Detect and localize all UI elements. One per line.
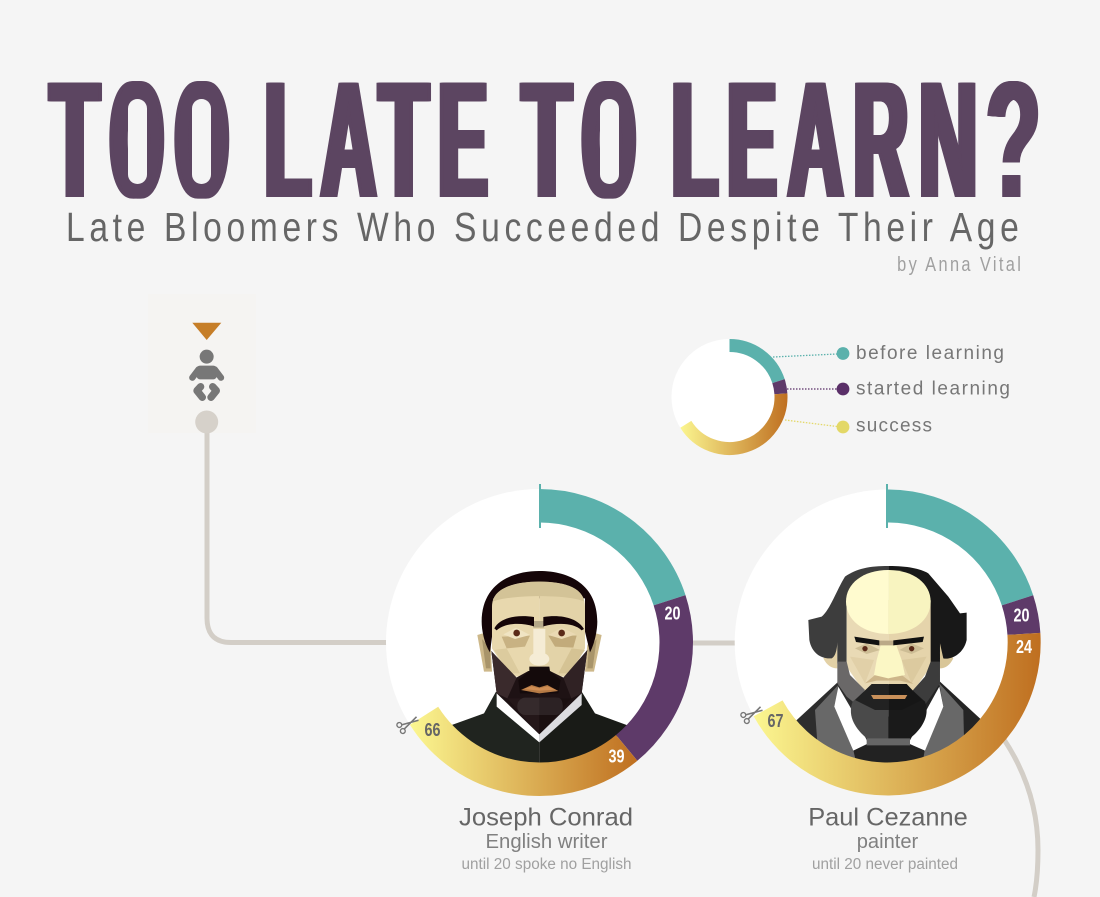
ring: Cezanne segments: [768, 484, 1024, 779]
portrait: Joseph Conrad: [452, 571, 627, 762]
title: E: [728, 48, 776, 233]
caption: Conrad: English writer: [486, 830, 608, 853]
title: T: [522, 48, 571, 233]
connector line: birth to Conrad: [207, 422, 400, 642]
title: O: [176, 48, 228, 233]
panel: Joseph Conrad: [386, 484, 693, 873]
age labels: Conrad: [424, 604, 680, 766]
caption: Cezanne: Paul Cezanne: [808, 804, 968, 832]
title: N: [919, 48, 977, 233]
title: ?: [986, 48, 1041, 233]
caption: Conrad: until 20 spoke no English: [462, 856, 632, 873]
legend: before learning: [773, 343, 1004, 364]
title: E: [439, 48, 487, 233]
age labels: Conrad: 39: [608, 746, 624, 766]
panel: birth marker: [148, 294, 256, 433]
title: T: [50, 48, 99, 233]
age labels: Cezanne: [768, 606, 1032, 731]
subtitle: Late Bloomers Who Succeeded Despite Their Age: [66, 204, 1019, 250]
connector line: Cezanne onward: [1003, 738, 1038, 897]
caption: Conrad: Joseph Conrad: [459, 804, 633, 832]
caption: Conrad: [459, 804, 633, 873]
portrait: Paul Cezanne: [795, 566, 982, 780]
infographic canvas: [68, 212, 1041, 897]
title: A: [788, 48, 843, 233]
ring: Conrad segments: [424, 484, 676, 779]
legend: started learning: started learning: [856, 378, 1010, 400]
age labels: Conrad: 66: [424, 720, 440, 740]
icon: start triangle: [192, 323, 221, 340]
caption: Cezanne: painter: [857, 830, 918, 853]
title: O: [583, 48, 635, 233]
legend: success: [785, 416, 932, 436]
title: L: [672, 48, 718, 233]
icon: baby: [192, 350, 221, 397]
legend: success: success: [856, 416, 932, 436]
timeline start dot: [195, 410, 218, 434]
age labels: Cezanne: 20: [1014, 606, 1030, 626]
icon: scissors, Cezanne: [740, 703, 764, 724]
caption: Cezanne: [808, 804, 968, 873]
legend donut: [672, 339, 788, 455]
title: R: [854, 48, 907, 233]
caption: Cezanne: until 20 never painted: [812, 856, 958, 873]
age labels: Conrad: 20: [664, 604, 680, 624]
title: T: [378, 48, 428, 233]
legend: started learning: [787, 378, 1010, 400]
title: [48, 48, 1041, 233]
title: L: [265, 48, 310, 233]
byline: by Anna Vital: [897, 252, 1021, 275]
icon: scissors, Conrad: [396, 713, 420, 734]
legend: before learning: before learning: [856, 343, 1004, 364]
age labels: Cezanne: 67: [768, 711, 784, 731]
title: O: [111, 48, 163, 233]
panel: Paul Cezanne: [735, 484, 1041, 873]
connector line: Conrad to Cezanne: [685, 640, 745, 646]
title: A: [321, 48, 376, 233]
age labels: Cezanne: 24: [1016, 637, 1032, 657]
